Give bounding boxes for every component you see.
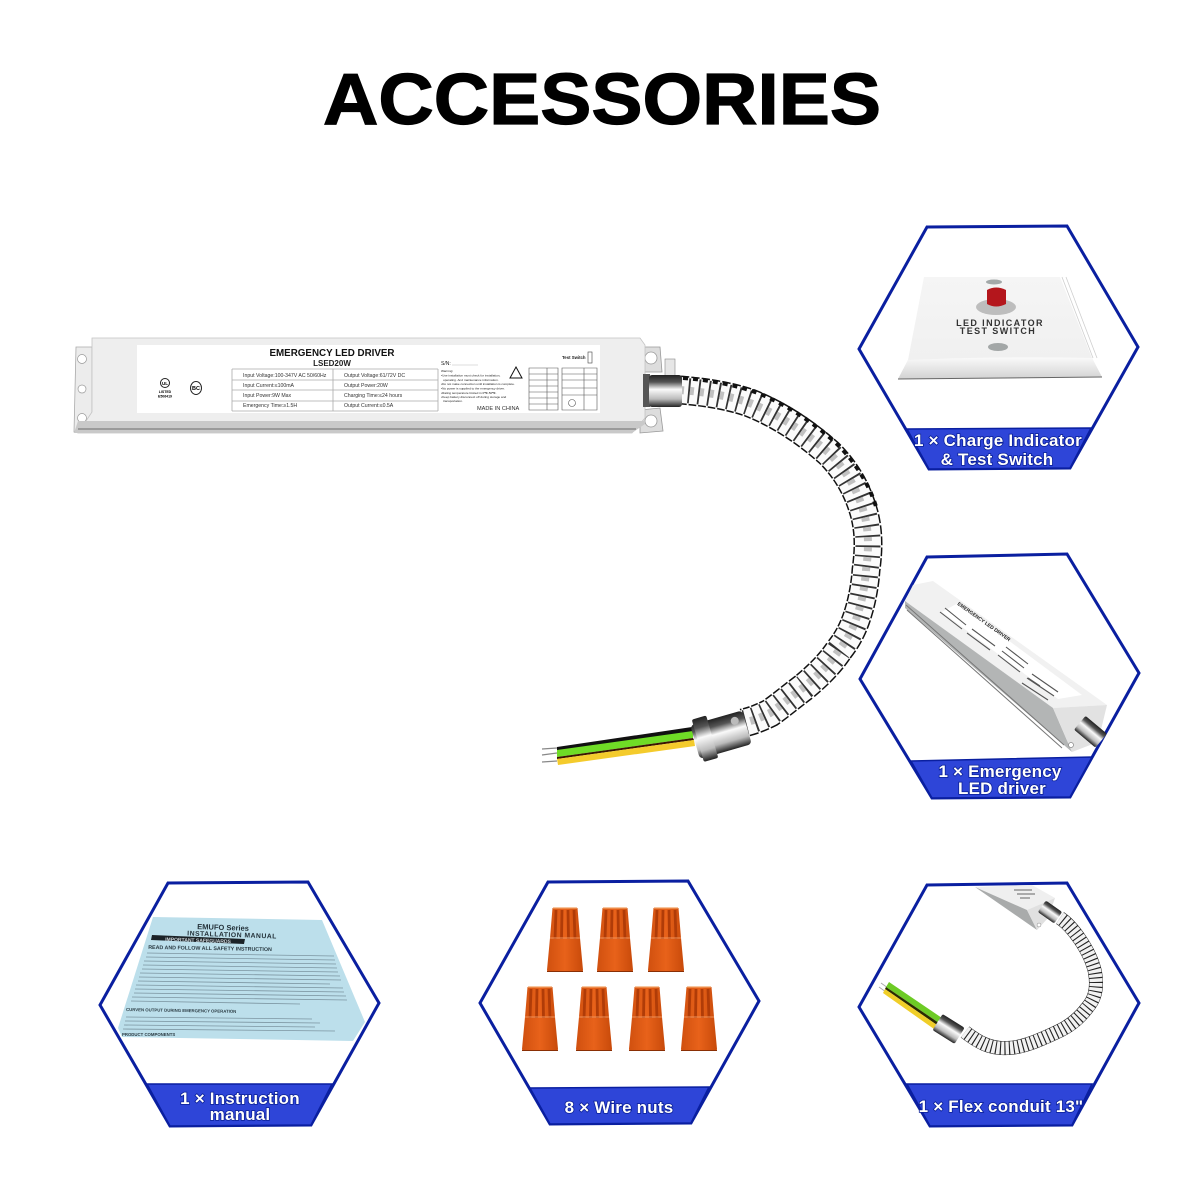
warnings: MADE IN CHINA (477, 406, 520, 412)
ratings table: Output Current:≤0.5A (344, 403, 394, 409)
icon: wire nuts (522, 908, 717, 1051)
driver label: Test Switch (562, 355, 586, 360)
warnings: •Keep battery disconnect off during storage and (441, 395, 506, 399)
driver body (74, 338, 645, 433)
ratings table: Input Voltage:100-347V AC 50/60Hz (243, 373, 327, 379)
icon: manual sheet (118, 917, 365, 1041)
driver mounting tabs (74, 347, 663, 433)
caption: & Test Switch (941, 450, 1053, 469)
caption: 1 × Instruction (180, 1089, 300, 1108)
wiring tables (529, 368, 597, 410)
caption: 1 × Charge Indicator (914, 431, 1082, 450)
icon: manual sheet: CURVEN OUTPUT DURING EMERGENCY OPERATION (126, 1007, 236, 1014)
caption (147, 1084, 332, 1126)
driver-side connector (643, 359, 682, 407)
icon: angled driver (905, 581, 1107, 752)
warnings: •Use installation must check for installation, (441, 374, 501, 378)
certification marks: E506419 (158, 394, 172, 398)
warnings: transportation. (443, 399, 463, 403)
icon: switch plate (898, 277, 1102, 379)
caption (530, 1087, 709, 1124)
icon: switch plate: TEST SWITCH (960, 326, 1036, 336)
driver label: LSED20W (313, 359, 351, 368)
icon: conduit assembly (879, 885, 1096, 1048)
driver label: EMERGENCY LED DRIVER (269, 348, 395, 359)
certification marks: BC (192, 386, 200, 392)
ratings table: Output Power:20W (344, 383, 388, 389)
caption: 8 × Wire nuts (565, 1098, 673, 1117)
ratings table (232, 369, 438, 411)
warnings: •Do not make connection until installation is complete. (441, 382, 515, 386)
ratings table: Output Voltage:61/72V DC (344, 373, 405, 379)
icon: switch plate: LED INDICATOR (956, 318, 1044, 328)
warnings: operating. And maintenance information. (443, 378, 499, 382)
caption (907, 428, 1091, 469)
caption: 1 × Emergency (938, 762, 1062, 781)
panel: emergency LED driver (860, 554, 1139, 798)
certification marks (158, 378, 202, 398)
warnings: •No power is supplied to the emergency driver. (441, 386, 505, 390)
main product: emergency LED driver with conduit (74, 338, 877, 765)
icon: manual sheet: INSTALLATION MANUAL (187, 930, 277, 941)
icon: manual sheet: READ AND FOLLOW ALL SAFETY INSTRUCTION (148, 945, 272, 953)
warnings (441, 361, 522, 412)
icon: manual sheet: PRODUCT COMPONENTS (122, 1032, 175, 1037)
caption: manual (210, 1105, 270, 1124)
warnings: Warning: (441, 369, 453, 373)
ratings table: Input Power:9W Max (243, 393, 292, 399)
panel: flex conduit (859, 883, 1139, 1126)
warnings: •Rating temperature limited in 0℃-50℃. (441, 391, 497, 395)
icon: angled driver: EMERGENCY LED DRIVER (956, 601, 1012, 643)
panel: instruction manual (100, 882, 379, 1126)
caption: 1 × Flex conduit 13" (919, 1097, 1083, 1116)
certification marks: UL (162, 381, 168, 386)
ratings table: Input Current:≤100mA (243, 383, 295, 389)
caption: LED driver (958, 779, 1046, 798)
ratings table: Charging Time:≤24 hours (344, 393, 403, 399)
driver label (137, 345, 600, 413)
caption (911, 757, 1092, 798)
certification marks: LISTED (159, 390, 172, 394)
caption (907, 1084, 1092, 1126)
ratings table: Emergency Time:≥1.5H (243, 403, 297, 409)
title: ACCESSORIES (323, 60, 881, 140)
end connector (689, 706, 753, 763)
panel: charge indicator and test switch (859, 226, 1138, 469)
wires (542, 727, 695, 765)
panel: wire nuts (480, 881, 759, 1124)
flex conduit (680, 378, 877, 723)
icon: manual sheet: EMUFO Series (197, 922, 249, 933)
icon: manual sheet: IMPORTANT SAFEGUARDS (165, 937, 232, 945)
warnings: S/N: (441, 361, 451, 367)
